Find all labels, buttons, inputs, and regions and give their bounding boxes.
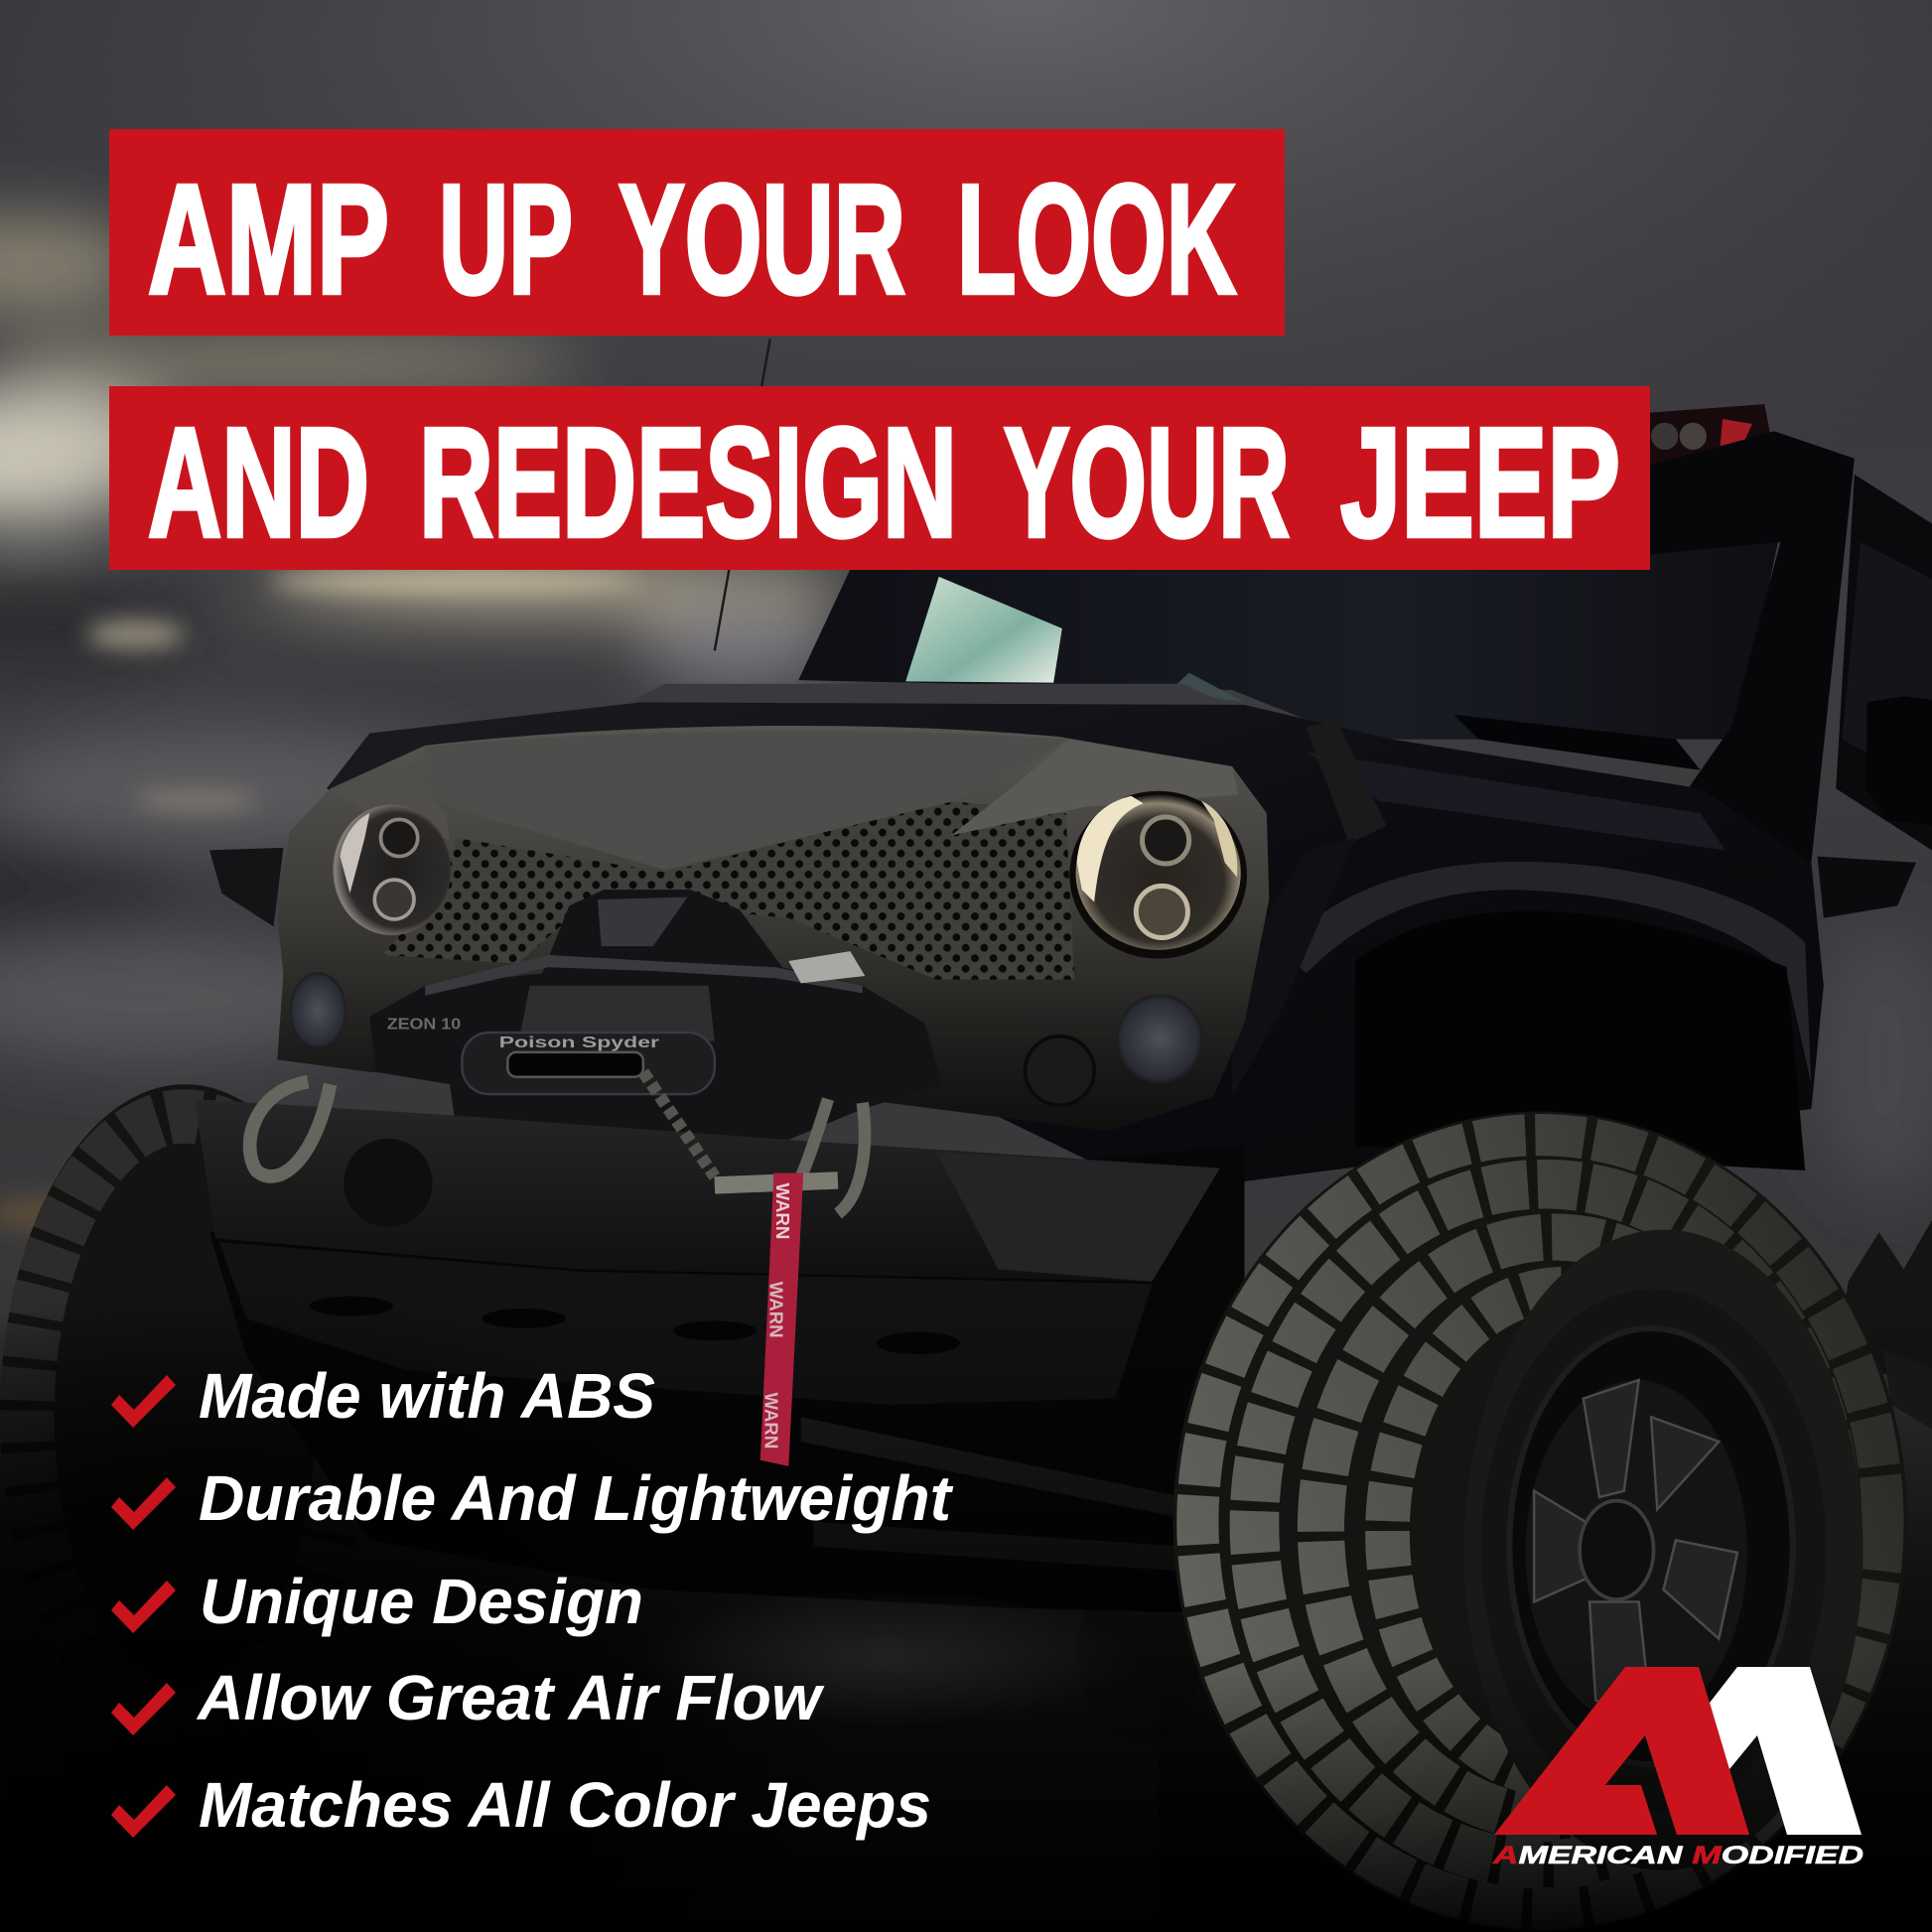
fairlead: Poison Spyder — [499, 1034, 660, 1051]
A-pillar and side window — [1649, 431, 1932, 918]
right fog light — [1116, 995, 1202, 1083]
left headlight — [333, 804, 451, 935]
feature 5: Matches All Color Jeeps — [199, 1769, 931, 1841]
left eyelid — [331, 759, 450, 840]
feature 1: Made with ABS — [199, 1360, 655, 1432]
shackles and winch rope — [250, 1072, 865, 1213]
rear quarter — [1882, 1349, 1932, 1430]
red winch strap — [760, 1173, 803, 1466]
check icon 2 — [111, 1477, 176, 1530]
front tyre — [1159, 1111, 1932, 1932]
fairlead — [462, 1033, 715, 1094]
headline banner 2: AND — [148, 396, 369, 570]
logo wordmark: A MERICAN M ODIFIED — [1492, 1842, 1863, 1869]
left tyre — [0, 1084, 1201, 1749]
headline banner 2: REDESIGN — [419, 396, 957, 570]
feature 2: Durable And Lightweight — [199, 1462, 954, 1534]
right headlight — [1069, 791, 1247, 959]
check icon 3 — [111, 1581, 176, 1633]
right eyelid — [951, 740, 1238, 835]
hood and fender body — [327, 684, 1824, 1182]
red winch strap: WARN — [772, 1182, 793, 1239]
red winch strap: WARN — [766, 1282, 787, 1338]
speaker vent — [1026, 1036, 1094, 1105]
winch — [369, 890, 942, 1140]
check icon 4 — [111, 1683, 176, 1735]
feature 3: Unique Design — [200, 1566, 643, 1637]
black wheel rim — [1509, 1328, 1793, 1764]
top plate — [425, 731, 1067, 870]
windshield — [798, 530, 1780, 740]
left fog light — [290, 972, 346, 1048]
roof light bar — [1649, 404, 1774, 469]
feature 4: Allow Great Air Flow — [196, 1662, 825, 1733]
front grille — [277, 726, 1269, 1131]
headline banner 2: JEEP — [1340, 396, 1620, 570]
headline banner 1: LOOK — [957, 153, 1236, 327]
headline banner 2: YOUR — [1004, 396, 1290, 570]
logo mark: red A — [1494, 1667, 1749, 1835]
left bumper end — [209, 848, 283, 926]
front bumper — [195, 1099, 1220, 1405]
road and lower-left shadow — [0, 1282, 1932, 1932]
dark underbody — [209, 1146, 1245, 1614]
headline banner 2 — [109, 386, 1650, 570]
red winch strap: WARN — [761, 1392, 782, 1449]
headline banner 1: AMP — [148, 153, 389, 327]
headline banner 1: YOUR — [619, 153, 905, 327]
winch: ZEON 10 — [387, 1015, 461, 1033]
feature list — [111, 1360, 954, 1841]
suspension and undercarriage — [801, 1417, 1182, 1571]
check icon 1 — [111, 1375, 176, 1428]
tree line right — [1836, 1220, 1932, 1380]
perforated mesh — [382, 801, 1074, 980]
logo mark: white 1 — [1710, 1667, 1862, 1835]
headline banner 1 — [109, 129, 1285, 336]
headline banner 1: UP — [439, 153, 573, 327]
check icon 5 — [111, 1785, 176, 1838]
logo: American Modified — [1492, 1667, 1863, 1869]
